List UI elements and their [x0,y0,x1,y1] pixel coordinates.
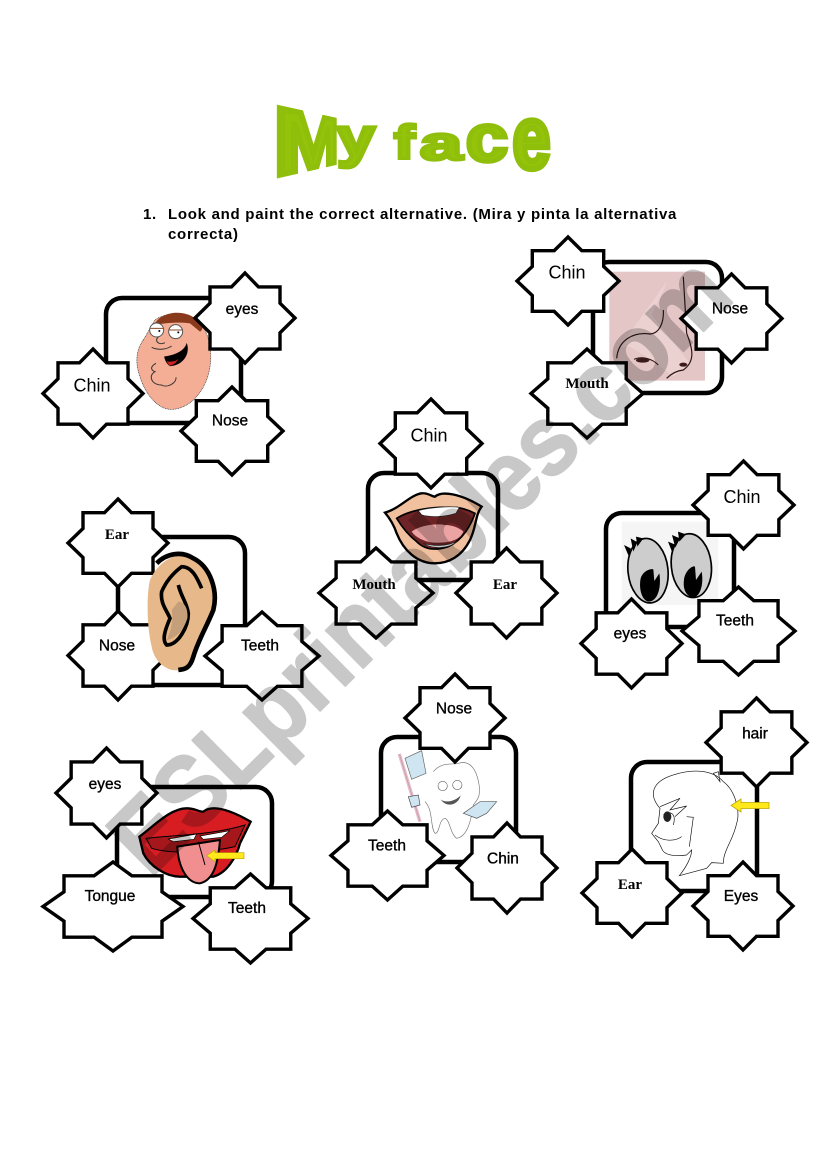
option: eyes: eyes [89,776,122,793]
option: Nose [68,611,168,700]
option: Nose: Nose [436,700,472,718]
option: Nose [405,674,505,762]
option: Chin: Chin [487,850,519,868]
title: M [273,86,338,198]
title: a [420,117,462,170]
option: Teeth [331,811,444,900]
option: Teeth: Teeth [368,838,406,854]
option: Mouth [319,548,433,638]
option: Chin: Chin [548,262,586,282]
icon: girl profile [652,771,738,876]
option: Ear: Ear [618,877,642,893]
icon: cartoon eyes [622,522,718,605]
option: hair: hair [742,726,768,742]
option: Tongue [43,862,183,951]
option: Teeth [682,587,795,675]
panel: Peter face [43,273,295,475]
option: Chin: Chin [410,426,448,446]
panel: eyes [581,461,795,688]
option: eyes: eyes [226,301,259,318]
panel: open mouth [319,399,557,638]
option: eyes: eyes [614,626,647,642]
option: Teeth [193,874,308,963]
watermark: ESLprintables.com [87,235,752,895]
option: Ear [68,499,168,587]
option: Teeth: Teeth [716,612,754,630]
panel: tooth [331,674,557,913]
title [273,86,551,198]
title: e [512,89,550,187]
title: f [394,116,415,169]
icon: tooth with toothbrush [399,751,497,838]
icon: nose drawing [609,272,705,381]
option: Ear [582,849,682,937]
option: Nose [181,387,283,475]
option: Teeth: Teeth [241,638,279,654]
option: hair [706,698,807,787]
option: Ear: Ear [493,577,517,593]
option: eyes [195,273,295,363]
text: 1. [143,206,157,223]
option: Chin [693,461,794,549]
instruction text [143,206,677,243]
panel: hair profile [582,698,807,950]
option: eyes [56,748,157,838]
icon: cartoon face [137,313,211,409]
title: c [466,102,508,176]
title: y [337,107,375,168]
option: eyes [581,599,682,688]
option: Chin [517,237,619,325]
option: Nose [681,274,782,363]
option: Tongue: Tongue [85,888,135,905]
option: Ear: Ear [105,527,129,543]
option: Eyes: Eyes [724,888,758,905]
option: Nose: Nose [212,412,248,430]
option: Mouth: Mouth [352,577,396,593]
icon: yellow arrow [731,799,769,812]
text: Look and paint the correct alternative. (Mira y pinta la alternativa [168,206,677,223]
panel: nose [517,237,782,438]
option: Mouth: Mouth [565,376,609,392]
option: Chin: Chin [723,487,761,507]
option: Mouth [531,349,643,438]
option: Chin [43,349,143,438]
option: Nose: Nose [712,300,748,318]
option: Ear [456,548,557,638]
option: Nose: Nose [99,638,135,654]
icon: open mouth [385,493,482,563]
panel: ear [68,499,319,700]
option: Chin [457,823,557,913]
option: Chin [380,399,482,488]
panel: lips and tongue [43,748,308,963]
icon: lips with tongue [139,808,251,883]
option: Teeth [205,612,319,700]
text: correcta) [168,226,239,243]
option: Teeth: Teeth [228,900,266,917]
option: Eyes [693,862,793,950]
option: Chin: Chin [73,376,111,396]
icon: ear [148,554,215,670]
